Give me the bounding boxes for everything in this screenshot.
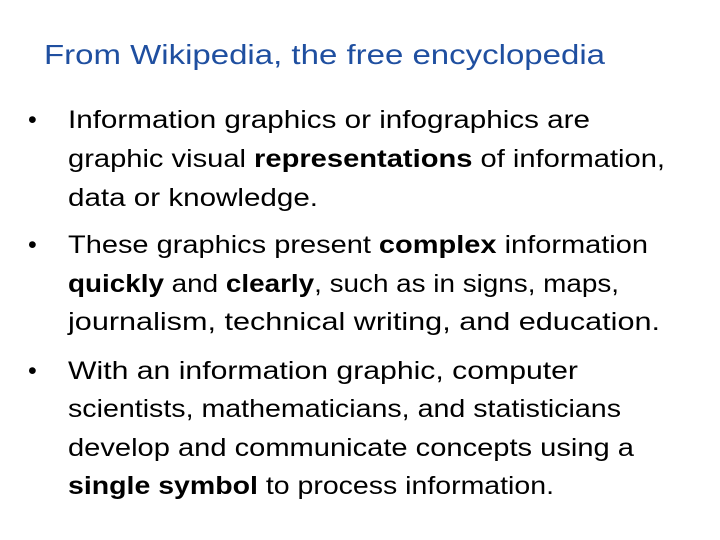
bullet 1: definition: • bbox=[28, 106, 37, 134]
bullet 1: definition: Information graphics or infographics are bbox=[68, 106, 590, 134]
bullet 3: usage: single symbol to process information. bbox=[68, 472, 554, 500]
bullet 2: purpose: quickly and clearly , such as in signs, maps, bbox=[68, 270, 619, 298]
bullet 3: usage: With an information graphic, computer bbox=[68, 357, 578, 385]
bullet 3: usage: develop and communicate concepts using a bbox=[68, 434, 634, 462]
bullet 3: usage: scientists, mathematicians, and statisticians bbox=[68, 395, 621, 423]
bullet 1: definition bbox=[28, 106, 665, 212]
bullet 2: purpose bbox=[28, 231, 660, 336]
bullet 1: definition: graphic visual representations of information, bbox=[68, 145, 665, 173]
bullet 3: usage bbox=[28, 357, 634, 500]
bullet 2: purpose: These graphics present complex information bbox=[68, 231, 648, 259]
title: From Wikipedia, the free encyclopedia bbox=[44, 39, 606, 70]
bullet 3: usage: • bbox=[28, 357, 37, 385]
bullet 2: purpose: • bbox=[28, 231, 37, 259]
bullet 1: definition: data or knowledge. bbox=[68, 184, 318, 212]
bullet 2: purpose: journalism, technical writing, and education. bbox=[67, 308, 660, 336]
